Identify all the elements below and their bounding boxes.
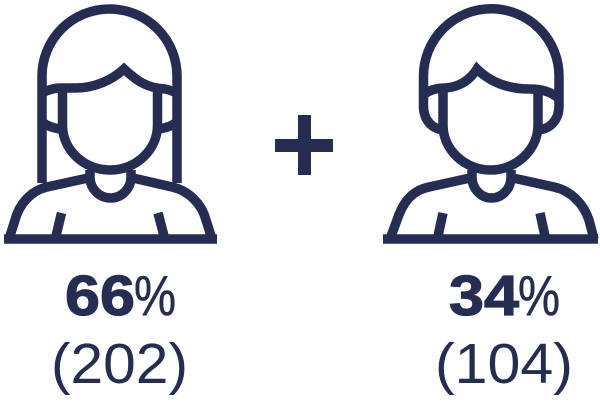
stat: women percentage: % (134, 264, 176, 328)
icon: man (383, 9, 598, 239)
plus sign (275, 115, 333, 175)
stat: women percentage (65, 264, 176, 328)
stat: men count: (104) (435, 332, 573, 396)
icon: woman (4, 9, 217, 239)
stat: women percentage: 66 (65, 264, 135, 328)
stat: men percentage (449, 264, 560, 328)
stat: men percentage: % (518, 264, 560, 328)
stat: women count: (202) (51, 332, 188, 396)
stat: men percentage: 34 (449, 264, 519, 328)
